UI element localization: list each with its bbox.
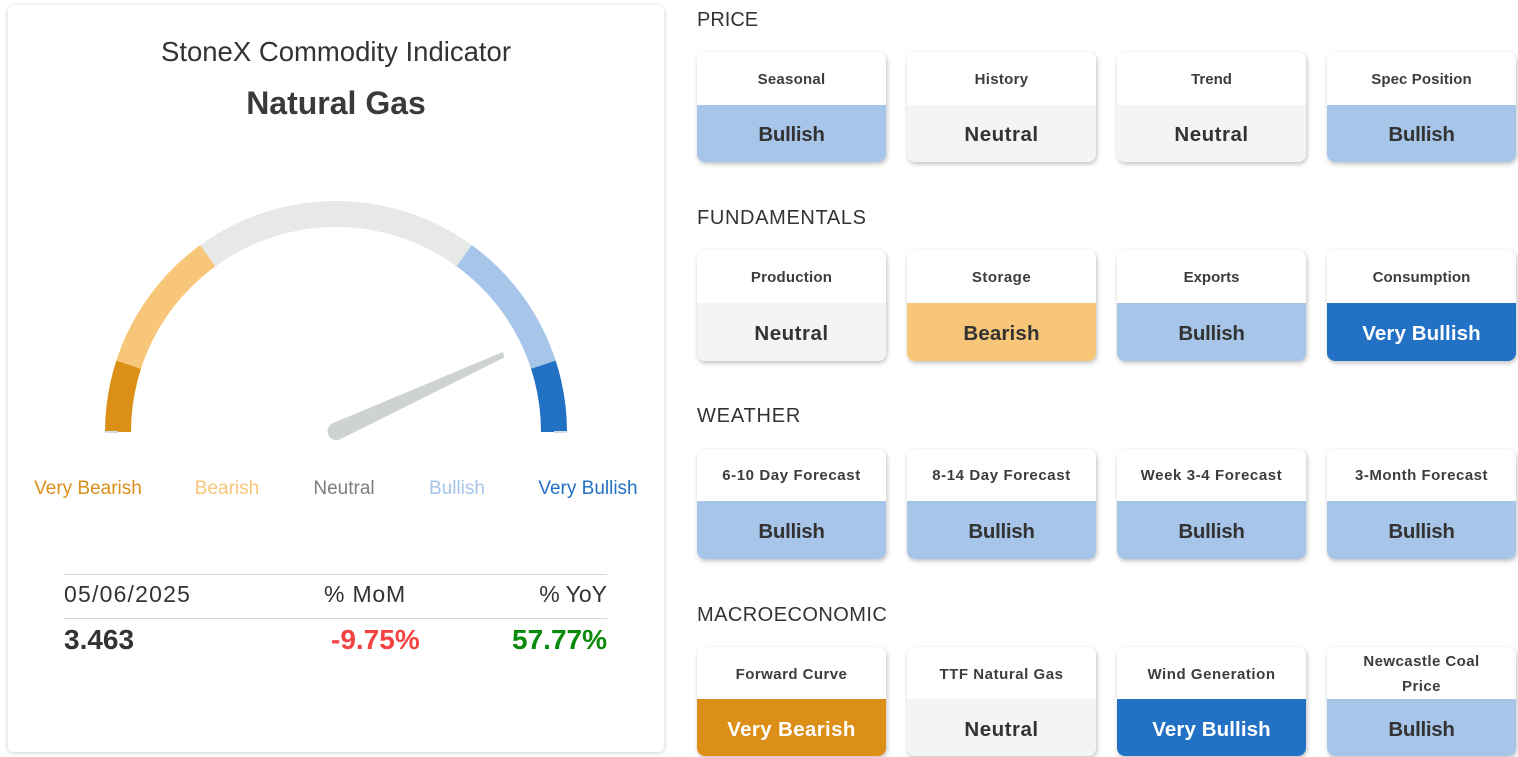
card: forward curve — [697, 647, 886, 756]
legend label: bullish: Bullish — [429, 478, 485, 499]
card: 3-month forecast: 3-Month Forecast — [1355, 467, 1488, 484]
stat value: month over month change: -9.75% — [331, 624, 420, 655]
gauge chart — [105, 201, 567, 440]
heading: fundamentals: FUNDAMENTALS — [697, 207, 867, 229]
card: spec position — [1327, 52, 1516, 162]
card: production: Production — [751, 269, 832, 286]
card: trend — [1117, 52, 1306, 162]
panel: commodity indicator — [8, 5, 664, 752]
card: wind generation — [1117, 647, 1306, 756]
card: 3-month forecast: Bullish — [1388, 520, 1455, 543]
card: storage: Storage — [972, 269, 1031, 286]
card: 3-month forecast — [1327, 449, 1516, 559]
stat header: month over month: % MoM — [324, 581, 406, 607]
card: storage — [907, 250, 1096, 361]
card: exports — [1117, 250, 1306, 361]
card: ttf natural gas — [907, 647, 1096, 756]
card: week 3-4 forecast — [1117, 449, 1306, 559]
gauge segment: bullish — [456, 245, 556, 369]
card: wind generation: Wind Generation — [1147, 666, 1276, 683]
legend label: bearish: Bearish — [195, 478, 259, 499]
card: history: Neutral — [964, 123, 1039, 146]
card: consumption: Very Bullish — [1362, 322, 1481, 345]
card: trend: Trend — [1191, 71, 1232, 88]
legend label: very bullish: Very Bullish — [538, 478, 638, 499]
card: ttf natural gas: TTF Natural Gas — [939, 666, 1064, 683]
card: history: History — [975, 71, 1028, 88]
stats table — [64, 574, 607, 655]
heading: weather: WEATHER — [697, 405, 801, 427]
card: forward curve: Very Bearish — [727, 718, 856, 741]
stat value: year over year change: 57.77% — [512, 624, 607, 655]
card: spec position: Spec Position — [1371, 71, 1472, 88]
gauge segment: very bullish — [531, 361, 567, 432]
card: newcastle coal price — [1327, 647, 1516, 756]
gauge baseline marks — [105, 431, 567, 433]
heading: macroeconomic: MACROECONOMIC — [697, 604, 887, 626]
card: 6-10 day forecast — [697, 449, 886, 559]
card: 6-10 day forecast: 6-10 Day Forecast — [722, 467, 861, 484]
card: 8-14 day forecast: Bullish — [968, 520, 1035, 543]
card: production: Neutral — [754, 322, 829, 345]
card: trend: Neutral — [1174, 123, 1249, 146]
card: newcastle coal price: Newcastle Coal — [1363, 653, 1480, 670]
gauge segment: neutral — [200, 201, 472, 266]
card: consumption: Consumption — [1373, 269, 1470, 286]
legend label: neutral: Neutral — [313, 478, 375, 499]
card: forward curve: Forward Curve — [736, 666, 847, 683]
card: exports: Exports — [1184, 269, 1239, 286]
title: StoneX Commodity Indicator — [161, 36, 511, 67]
gauge needle — [328, 352, 505, 440]
card: wind generation: Very Bullish — [1152, 718, 1271, 741]
card: seasonal — [697, 52, 886, 162]
gauge segment: bearish — [116, 245, 216, 369]
card: newcastle coal price: Price — [1402, 678, 1441, 695]
legend: gauge labels — [34, 478, 638, 499]
card: 8-14 day forecast: 8-14 Day Forecast — [932, 467, 1071, 484]
card: exports: Bullish — [1178, 322, 1245, 345]
card: seasonal: Bullish — [758, 123, 825, 146]
card: 6-10 day forecast: Bullish — [758, 520, 825, 543]
card: consumption — [1327, 250, 1516, 361]
card: 8-14 day forecast — [907, 449, 1096, 559]
card: history — [907, 52, 1096, 162]
legend label: very bearish: Very Bearish — [34, 478, 142, 499]
gauge segment: very bearish — [105, 361, 141, 432]
card: spec position: Bullish — [1388, 123, 1455, 146]
card: production — [697, 250, 886, 361]
card: newcastle coal price: Bullish — [1388, 718, 1455, 741]
heading: price: PRICE — [697, 9, 758, 31]
stat header: year over year: % YoY — [539, 581, 607, 607]
card: week 3-4 forecast: Bullish — [1178, 520, 1245, 543]
card: week 3-4 forecast: Week 3-4 Forecast — [1141, 467, 1282, 484]
card: seasonal: Seasonal — [758, 71, 825, 88]
card: storage: Bearish — [963, 322, 1040, 345]
stat header: date: 05/06/2025 — [64, 581, 191, 607]
heading: commodity name: Natural Gas — [246, 85, 426, 121]
stat value: price: 3.463 — [64, 624, 134, 655]
card: ttf natural gas: Neutral — [964, 718, 1039, 741]
